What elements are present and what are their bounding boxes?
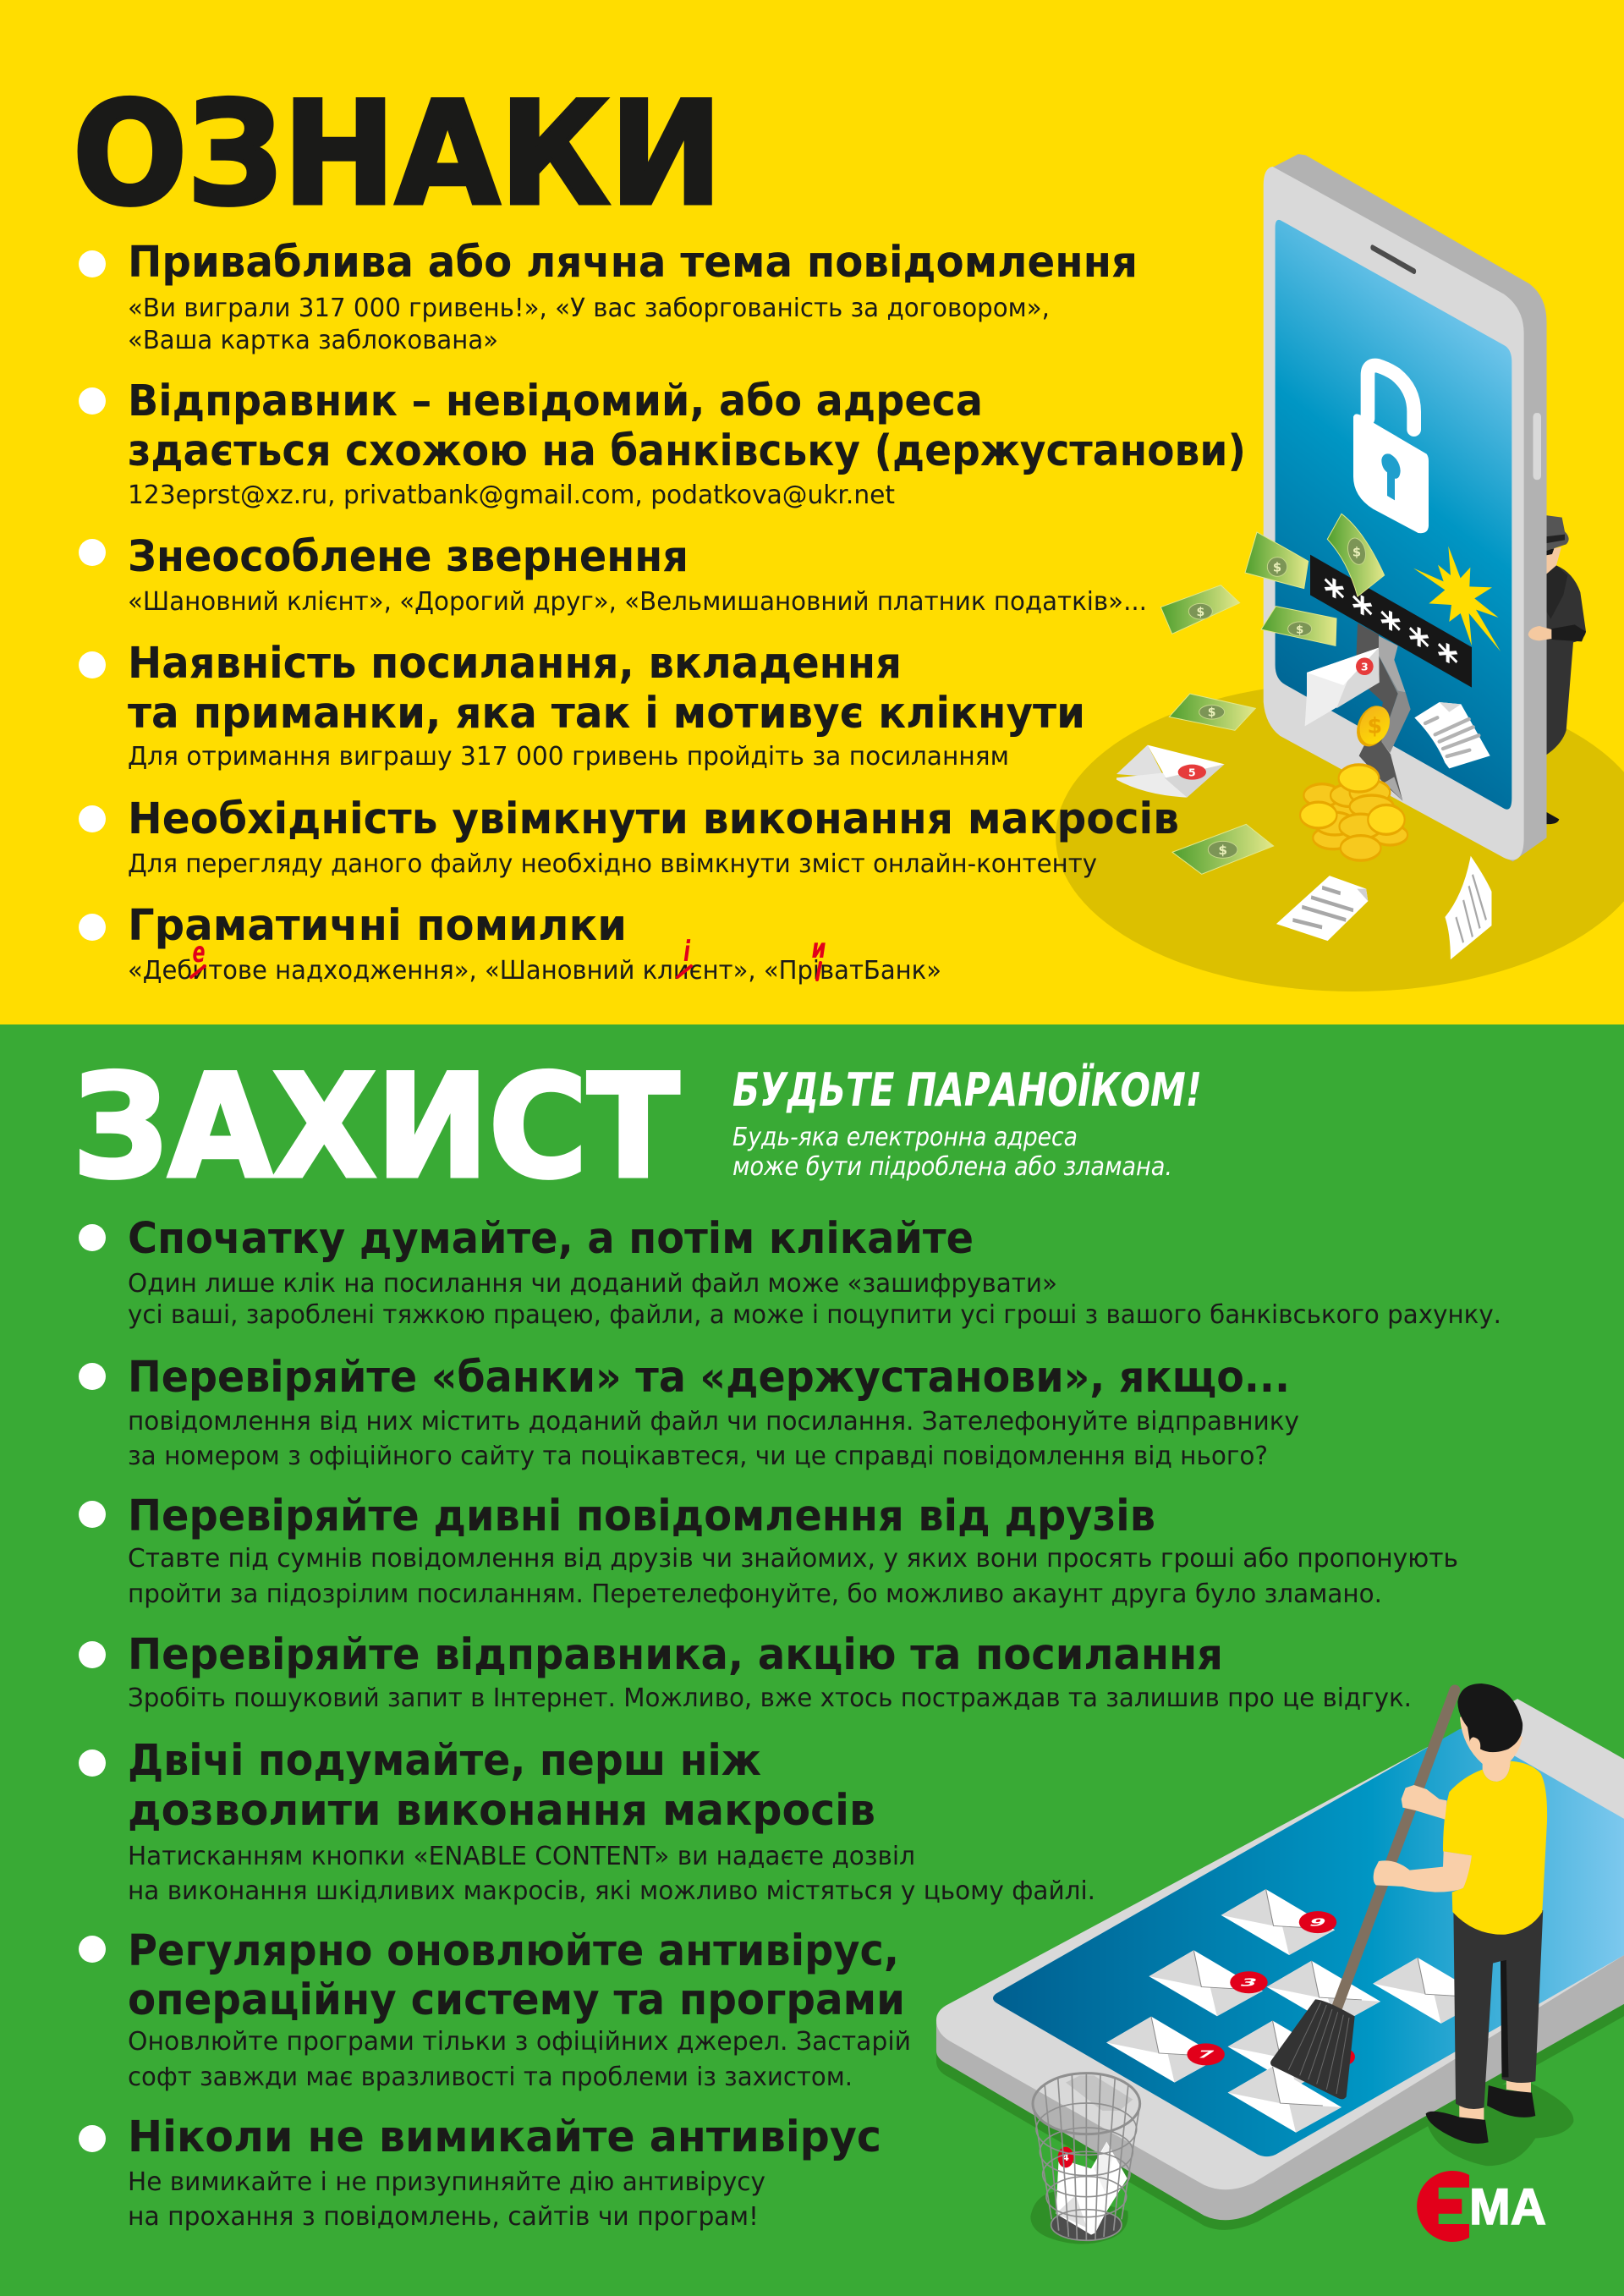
sign description: Для перегляду даного файлу необхідно ввімкнути зміст онлайн-контенту bbox=[128, 849, 1097, 879]
falling coin bbox=[1351, 701, 1396, 751]
flat phone with emails and legs bbox=[936, 1699, 1624, 2230]
sign heading: Наявність посилання, вкладення bbox=[128, 639, 902, 689]
password bar bbox=[1310, 555, 1472, 689]
sign 2 bbox=[79, 376, 1246, 510]
logo EMA bbox=[1417, 2171, 1546, 2242]
tip 3 bbox=[79, 1491, 1458, 1609]
money bills on screen: $ bbox=[1352, 545, 1361, 559]
tip description: Ставте під сумнів повідомлення від друзів чи знайомих, у яких вони просять гроші або пропонують bbox=[128, 1544, 1458, 1574]
crack in screen bbox=[1356, 623, 1411, 801]
bullet bbox=[79, 1641, 106, 1668]
password bar: * bbox=[1380, 600, 1402, 657]
icon: starburst bbox=[1413, 547, 1501, 651]
tip description bbox=[128, 1544, 1458, 1609]
sign 6 bbox=[79, 901, 941, 986]
tip description: повідомлення від них містить доданий файл чи посилання. Зателефонуйте відправнику bbox=[128, 1407, 1299, 1436]
tip description: на прохання з повідомлень, сайтів чи програм! bbox=[128, 2202, 759, 2232]
tip heading: Перевіряйте відправника, акцію та посилання bbox=[128, 1630, 1223, 1680]
bills and envelope on the ground bbox=[1116, 585, 1274, 874]
title: protection: ЗАХИСТ bbox=[73, 1044, 679, 1210]
sign description: 123eprst@xz.ru, privatbank@gmail.com, podatkova@ukr.net bbox=[128, 481, 895, 510]
icon: open padlock bbox=[1353, 365, 1429, 533]
man shadow bbox=[1426, 2084, 1573, 2166]
tip description bbox=[128, 2027, 911, 2092]
tip description bbox=[128, 1269, 1501, 1330]
wastebasket with emails: 4 bbox=[1062, 2151, 1069, 2163]
man legs bbox=[1426, 1910, 1543, 2144]
slogan block: Будь-яка електронна адреса bbox=[732, 1123, 1078, 1152]
wastebasket with emails bbox=[1030, 2074, 1140, 2244]
sign 1 bbox=[79, 238, 1138, 355]
sign heading: Знеособлене звернення bbox=[128, 532, 689, 582]
bill on ground: $ bbox=[1208, 706, 1216, 720]
panel: signs (yellow) bbox=[0, 0, 1624, 1024]
bill on ground, right: $ bbox=[1218, 843, 1227, 858]
bullet bbox=[79, 1749, 106, 1777]
spy hand and arm bbox=[1528, 626, 1551, 640]
flying bill bbox=[1160, 585, 1240, 634]
email icons: 3 bbox=[1237, 1977, 1259, 1989]
sign heading: Приваблива або лячна тема повідомлення bbox=[128, 238, 1138, 288]
tip description: за номером з офіційного сайту та поцікавтеся, чи це справді повідомлення від нього? bbox=[128, 1442, 1268, 1471]
man upper body bbox=[1374, 1684, 1547, 1935]
sign description with red corrections bbox=[128, 932, 941, 986]
slogan block: може бути підроблена або зламана. bbox=[732, 1152, 1172, 1182]
sign 3 bbox=[79, 532, 1147, 617]
flying bill: $ bbox=[1196, 606, 1204, 619]
sign description: Для отримання виграшу 317 000 гривень пройдіть за посиланням bbox=[128, 742, 1009, 772]
money bills on screen bbox=[1245, 514, 1385, 645]
panel: protection (green) bbox=[0, 1024, 1624, 2296]
tip description: усі ваші, зароблені тяжкою працею, файли, а може і поцупити усі гроші з вашого банківського рахунку. bbox=[128, 1300, 1501, 1330]
tip heading bbox=[128, 1926, 905, 2025]
tip description: пройти за підозрілим посиланням. Перетелефонуйте, бо можливо акаунт друга було зламано. bbox=[128, 1579, 1382, 1609]
tip description bbox=[128, 2167, 765, 2232]
curled paper on ground bbox=[1445, 856, 1491, 959]
bullet bbox=[79, 1501, 106, 1528]
sign description: «Шановний клієнт», «Дорогий друг», «Вельмишановний платник податків»... bbox=[128, 587, 1147, 617]
slogan block bbox=[732, 1063, 1202, 1182]
bullet bbox=[79, 805, 106, 832]
illustration: man sweeping emails bbox=[936, 1684, 1624, 2244]
envelope with badge 5: 5 bbox=[1188, 766, 1196, 778]
bullet bbox=[79, 250, 106, 277]
bill on ground, right bbox=[1172, 824, 1274, 874]
sign description with red corrections: е bbox=[193, 936, 205, 969]
slogan block: БУДЬТЕ ПАРАНОЇКОМ! bbox=[732, 1063, 1202, 1117]
tip description: софт завжди має вразливості та проблеми із захистом. bbox=[128, 2063, 853, 2092]
sign heading: та приманки, яка так і мотивує клікнути bbox=[128, 689, 1085, 739]
tip heading: Перевіряйте «банки» та «держустанови», якщо... bbox=[128, 1353, 1290, 1403]
title: signs: ОЗНАКИ bbox=[73, 71, 722, 237]
sign 4 bbox=[79, 639, 1085, 772]
tip heading: Спочатку думайте, а потім клікайте bbox=[128, 1214, 974, 1264]
sign heading: здається схожою на банківську (держустанови) bbox=[128, 426, 1246, 476]
phone lying flat bbox=[936, 1699, 1624, 2230]
tip heading: Регулярно оновлюйте антивірус, bbox=[128, 1926, 899, 1976]
tip heading: дозволити виконання макросів bbox=[128, 1786, 875, 1836]
broom stick bbox=[1337, 1690, 1455, 2007]
broom head bbox=[1270, 1999, 1355, 2099]
envelope with badge 3 bbox=[1305, 648, 1380, 726]
bullet bbox=[79, 2125, 106, 2152]
tip 4 bbox=[79, 1630, 1412, 1713]
sign heading: Відправник – невідомий, або адреса bbox=[128, 376, 983, 426]
document on screen bbox=[1414, 702, 1490, 768]
bullet bbox=[79, 387, 106, 415]
green background bbox=[0, 1024, 1624, 2296]
illustration: hacked phone bbox=[1116, 154, 1586, 959]
sign description: «Ваша картка заблокована» bbox=[128, 326, 498, 355]
tip 7 bbox=[79, 2112, 881, 2232]
bullet bbox=[79, 651, 106, 678]
ground shadow ellipse bbox=[1056, 682, 1624, 991]
logo EMA: MA bbox=[1469, 2178, 1546, 2235]
money bills on screen: $ bbox=[1296, 623, 1303, 636]
password bar: * bbox=[1437, 632, 1458, 689]
sign 5 bbox=[79, 794, 1179, 879]
tip heading: Перевіряйте дивні повідомлення від друзів bbox=[128, 1491, 1155, 1541]
sign heading: Граматичні помилки bbox=[128, 901, 627, 951]
tip description: на виконання шкідливих макросів, які можливо містяться у цьому файлі. bbox=[128, 1876, 1095, 1906]
tip description: Зробіть пошуковий запит в Інтернет. Можливо, вже хтось постраждав та залишив про це відгук. bbox=[128, 1684, 1412, 1713]
sign description with red corrections: і bbox=[683, 935, 691, 969]
money bills on screen: $ bbox=[1273, 560, 1281, 574]
phone screen bbox=[993, 1728, 1624, 2156]
sign description bbox=[128, 294, 1050, 355]
bullet bbox=[79, 914, 106, 941]
bullet bbox=[79, 1363, 106, 1390]
sign heading: Необхідність увімкнути виконання макросів bbox=[128, 794, 1179, 844]
sign description: «Ви виграли 317 000 гривень!», «У вас заборгованість за договором», bbox=[128, 294, 1050, 323]
yellow background bbox=[0, 0, 1624, 1024]
envelope with badge 3: 3 bbox=[1361, 660, 1369, 673]
envelope with badge 5 bbox=[1116, 745, 1225, 798]
tip description: Не вимикайте і не призупиняйте дію антивірусу bbox=[128, 2167, 765, 2197]
tip heading: операційну систему та програми bbox=[128, 1975, 905, 2025]
tip heading bbox=[128, 1736, 875, 1836]
tip description bbox=[128, 1842, 1095, 1906]
tip description: Натисканням кнопки «ENABLE CONTENT» ви надаєте дозвіл bbox=[128, 1842, 915, 1871]
sign heading bbox=[128, 376, 1246, 476]
email icons: 9 bbox=[1307, 1917, 1329, 1929]
tip 1 bbox=[79, 1214, 1501, 1330]
tip description bbox=[128, 1407, 1299, 1471]
sign description with red corrections: «Дебитове надходження», «Шановний клиєнт», «ПрівaтБанк» bbox=[128, 956, 941, 986]
bill on ground bbox=[1169, 694, 1255, 730]
tip 6 bbox=[79, 1926, 911, 2092]
bullet bbox=[79, 1224, 106, 1251]
email icons: 7 bbox=[1194, 2049, 1216, 2061]
paper on ground bbox=[1276, 876, 1368, 941]
tip heading: Ніколи не вимикайте антивірус bbox=[128, 2112, 881, 2162]
tip 5 bbox=[79, 1736, 1095, 1906]
phone body bbox=[1264, 154, 1547, 861]
tip heading: Двічі подумайте, перш ніж bbox=[128, 1736, 761, 1786]
bullet bbox=[79, 1936, 106, 1963]
tip description: Один лише клік на посилання чи доданий файл може «зашифрувати» bbox=[128, 1269, 1057, 1299]
password bar: * bbox=[1408, 616, 1429, 673]
password bar: * bbox=[1352, 584, 1373, 641]
screen details: crack, password, money, envelope bbox=[1245, 514, 1551, 801]
spy behind phone bbox=[1545, 515, 1586, 824]
sign description with red corrections: и bbox=[812, 932, 826, 964]
password bar: * bbox=[1324, 567, 1345, 624]
tip 2 bbox=[79, 1353, 1299, 1471]
tip description: Оновлюйте програми тільки з офіційних джерел. Застарій bbox=[128, 2027, 911, 2057]
bullet bbox=[79, 539, 106, 566]
coin pile bbox=[1276, 765, 1491, 959]
sign heading bbox=[128, 639, 1085, 739]
falling coin: $ bbox=[1368, 713, 1382, 739]
email icons bbox=[1106, 1889, 1487, 2133]
